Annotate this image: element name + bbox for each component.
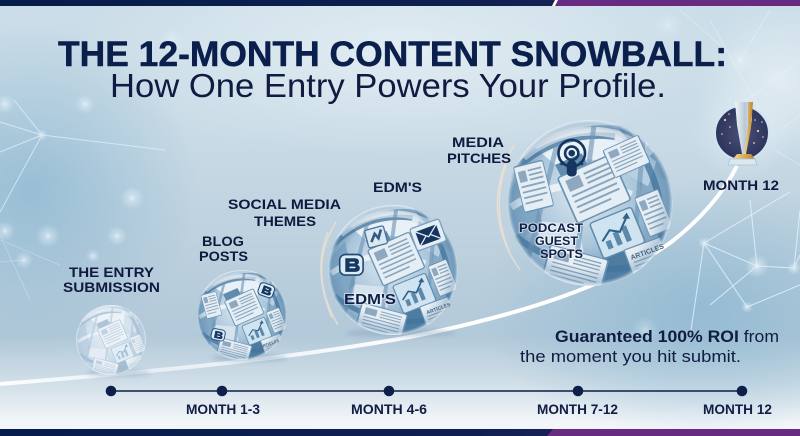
motion arcs — [497, 145, 520, 270]
icon: envelope — [409, 219, 447, 251]
label: media pitches: MEDIA — [452, 134, 504, 150]
podcast guest spots label: SPOTS — [540, 247, 583, 261]
label: month 12 top: MONTH 12 — [703, 177, 779, 193]
articles label: ARTICLES — [426, 302, 452, 316]
label: blog posts: POSTS — [199, 248, 248, 264]
icon: blog B — [257, 282, 276, 299]
podcast guest spots label: PODCAST — [519, 221, 584, 235]
label: blog posts: BLOG — [202, 233, 244, 249]
roi callout: the moment you hit submit. — [520, 348, 741, 366]
label: media pitches — [447, 134, 511, 166]
trophy glow — [691, 84, 795, 180]
month labels: MONTH 7-12 — [537, 402, 618, 417]
label: media pitches: PITCHES — [447, 150, 511, 166]
labels — [63, 134, 779, 295]
label: blog posts — [199, 233, 248, 264]
label: social media themes: SOCIAL MEDIA — [228, 196, 341, 212]
title line 1: THE 12-MONTH CONTENT SNOWBALL: — [58, 35, 727, 74]
icon: podcast — [558, 140, 585, 176]
podcast guest spots label — [519, 221, 584, 261]
icon: small chart — [364, 226, 388, 248]
label: social media themes: THEMES — [254, 213, 316, 229]
label: edms: EDM'S — [373, 179, 422, 195]
snowball: edms — [321, 204, 458, 341]
snowball: blog posts — [197, 270, 288, 364]
motion arcs — [321, 222, 338, 325]
title line 2: How One Entry Powers Your Profile. — [110, 67, 666, 104]
label: the entry submission — [63, 264, 160, 295]
month labels — [186, 402, 772, 417]
month labels: MONTH 12 — [703, 402, 772, 417]
icon: blog B — [340, 255, 363, 275]
icon: blog B small — [210, 328, 226, 342]
month labels: MONTH 4-6 — [351, 402, 428, 417]
roi callout — [520, 328, 779, 366]
month labels: MONTH 1-3 — [186, 402, 260, 417]
podcast guest spots label: GUEST — [535, 234, 579, 248]
roi callout: Guaranteed 100% ROI from — [555, 328, 779, 346]
label: the entry submission: SUBMISSION — [63, 279, 160, 295]
trophy — [691, 84, 795, 180]
label: social media themes — [228, 196, 341, 229]
top bar — [0, 0, 800, 6]
trophy cup — [735, 102, 752, 154]
title — [58, 35, 727, 104]
snowball: the entry — [76, 305, 150, 378]
bottom bar — [0, 429, 800, 436]
medallion — [715, 106, 769, 160]
label: the entry submission: THE ENTRY — [69, 264, 155, 280]
edms inner label: EDM'S — [344, 291, 396, 308]
articles label: ARTICLES — [630, 243, 665, 262]
snowball: media pitches — [497, 119, 673, 294]
articles label: ARTICLES — [259, 338, 280, 349]
growth curve — [0, 166, 737, 384]
network lines left — [0, 26, 186, 300]
network lines right — [631, 10, 800, 344]
timeline — [106, 386, 772, 417]
